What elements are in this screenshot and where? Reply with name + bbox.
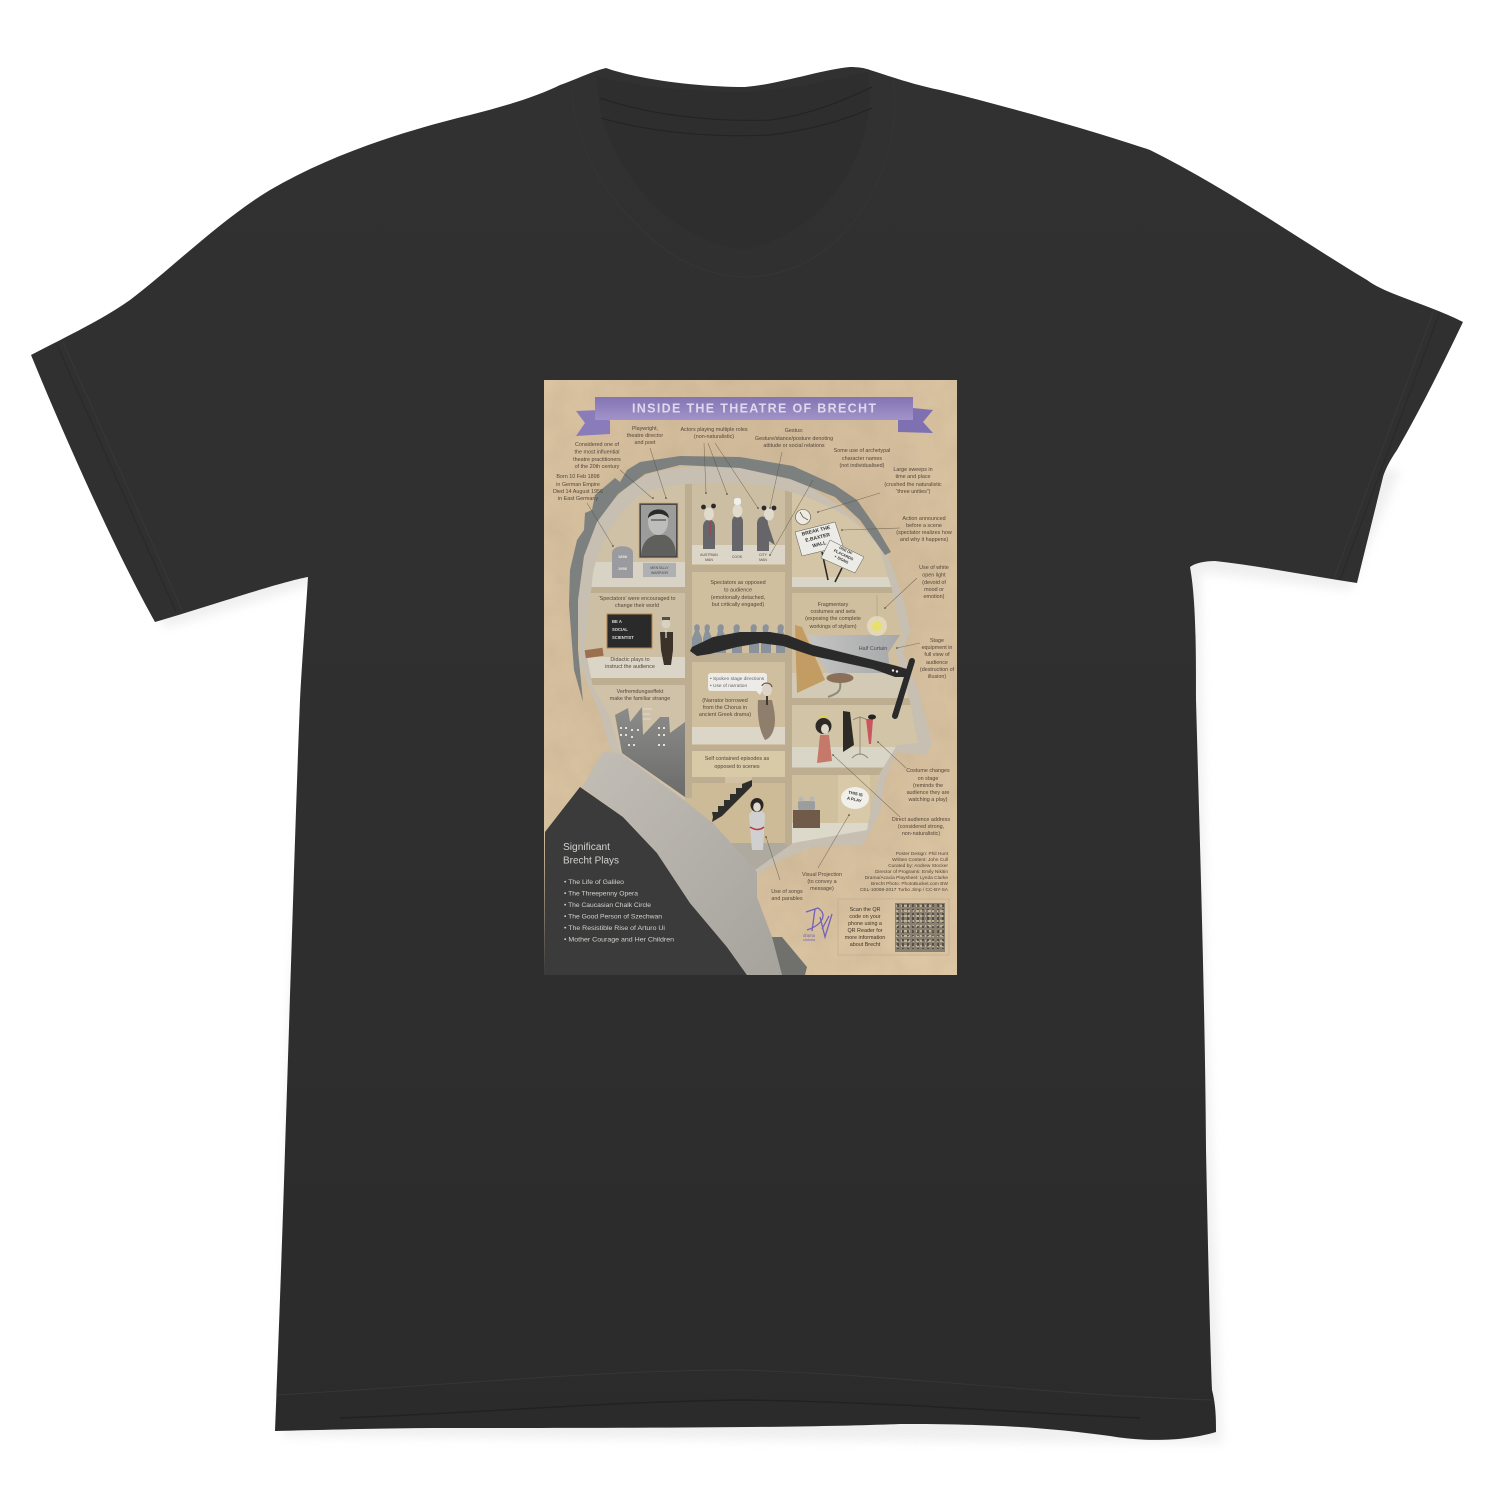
placard: use of placards xyxy=(821,540,864,573)
annotations right: (destruction of xyxy=(920,667,955,673)
tombstone: 1956 xyxy=(618,566,628,571)
annotations inside rooms: (Narrator borrowed xyxy=(702,698,748,704)
annotations left and top: Some use of archetypal xyxy=(834,448,890,454)
annotations right: Stage xyxy=(930,638,944,644)
room: portrait xyxy=(591,562,685,593)
annotations right: full view of xyxy=(924,652,950,658)
actor 3 xyxy=(757,506,776,551)
placard: break the wall xyxy=(795,522,843,556)
half curtain xyxy=(807,635,900,673)
queen figure xyxy=(816,715,832,763)
factory xyxy=(615,707,685,797)
credits xyxy=(860,851,949,893)
projection screen: A PLAY xyxy=(847,795,862,803)
annotations right: before a scene xyxy=(906,523,942,529)
significant plays list: • The Caucasian Chalk Circle xyxy=(564,902,652,909)
head cross-section xyxy=(569,456,940,890)
annotations right: and why it happens) xyxy=(900,537,948,543)
annotations right: “three unities”) xyxy=(896,489,931,495)
blackboard: SOCIAL xyxy=(612,627,628,632)
significant plays list: Brecht Plays xyxy=(563,856,619,866)
blackboard: BE A xyxy=(612,619,622,624)
placard: use of placards: USE OF xyxy=(838,546,853,556)
actor captions: COOK xyxy=(732,555,743,559)
actor captions: CITY xyxy=(759,553,768,557)
QR panel: QR Reader for xyxy=(847,928,883,934)
annotations right: audience they are xyxy=(907,790,949,796)
annotations right: non-naturalistic) xyxy=(902,831,940,837)
placard: break the wall: BREAK THE xyxy=(801,525,832,538)
black costume panel xyxy=(843,711,854,752)
annotations inside rooms: from the Chorus in xyxy=(703,705,747,711)
annotations inside rooms: to audience xyxy=(724,588,752,594)
projection screen: THIS IS xyxy=(848,790,863,798)
credits: Written Content: John Cull xyxy=(892,857,948,863)
drama victoria logo xyxy=(803,908,832,942)
annotations right: (crushed the naturalistic xyxy=(884,482,942,488)
significant plays list xyxy=(563,842,675,944)
annotations inside rooms: Verfremdungseffekt xyxy=(617,689,664,695)
annotations left and top: theatre director xyxy=(627,433,663,439)
annotations right: Large sweeps in xyxy=(893,467,933,473)
room: projection xyxy=(792,823,868,844)
actor 1 xyxy=(701,504,716,549)
speech bubble: • Use of narration xyxy=(710,683,747,689)
QR code xyxy=(895,903,945,952)
half curtain: Half Curtain xyxy=(859,646,887,652)
significant plays list: • The Resistible Rise of Arturo Ui xyxy=(564,925,665,932)
speech bubble xyxy=(708,673,767,695)
typewriter and desk xyxy=(793,796,820,828)
annotations inside rooms: opposed to scenes xyxy=(714,764,760,770)
head outer stone band xyxy=(575,466,932,875)
name plaque: MENTALLY xyxy=(650,566,669,570)
annotations left and top: character names xyxy=(842,456,882,462)
annotations inside rooms: ‘Spectators’ were encouraged to xyxy=(598,596,676,602)
annotations inside rooms: change their world xyxy=(615,603,659,609)
QR panel: phone using a xyxy=(848,921,882,927)
narrator figure xyxy=(758,683,775,740)
tombstone xyxy=(612,546,633,578)
annotations left and top: Gesture/stance/posture denoting xyxy=(755,436,833,442)
annotations left and top: Gestus: xyxy=(785,428,803,434)
annotations right: Action announced xyxy=(902,516,946,522)
projection screen xyxy=(841,787,869,809)
room: episodes xyxy=(692,777,785,783)
annotations right: time and place xyxy=(895,474,931,480)
speech bubble: • Spoken stage directions xyxy=(710,676,765,682)
annotations right: Costume changes xyxy=(906,768,950,774)
annotations right: illusion) xyxy=(928,674,946,680)
annotations left and top: Actors playing multiple roles xyxy=(680,427,748,433)
stool xyxy=(826,673,854,697)
jacket dark xyxy=(544,787,747,975)
annotations right: (considered strong, xyxy=(898,824,945,830)
annotations left and top: and poet xyxy=(635,440,656,446)
room: actors xyxy=(692,545,785,572)
annotations right: audience xyxy=(926,660,948,666)
QR panel xyxy=(838,899,949,955)
annotations inside rooms: Didactic plays to xyxy=(610,657,650,663)
placard sticks xyxy=(822,552,842,582)
annotations inside rooms: (exposing the complete xyxy=(805,616,861,622)
significant plays list: • The Threepenny Opera xyxy=(564,890,639,898)
annotations left and top: the most influential xyxy=(575,450,619,456)
annotations inside rooms: ancient Greek drama) xyxy=(699,712,751,718)
annotations bottom: Use of songs xyxy=(771,889,803,895)
banner xyxy=(576,397,933,436)
annotations right: mood or xyxy=(924,587,944,593)
drama victoria logo: victoria xyxy=(803,938,816,942)
poster paper xyxy=(544,380,957,975)
orange flat xyxy=(795,625,825,693)
shirt collar xyxy=(582,752,782,975)
credits: Curated by: Andrew Stocker xyxy=(888,863,948,869)
room: stage equipment xyxy=(792,673,910,705)
clock xyxy=(796,510,810,524)
credits: CEL-10069-2017 Turbo Jimp / CC-BY-SA xyxy=(860,887,949,893)
banner title: INSIDE THE THEATRE OF BRECHT xyxy=(632,402,876,416)
placard: break the wall: E.BAXTER xyxy=(805,532,831,544)
annotations right: (devoid of xyxy=(922,580,946,586)
drama victoria logo: drama xyxy=(803,933,816,938)
credits: Brecht Photo: PhotoBucket.com BW xyxy=(871,881,948,887)
wooden sign xyxy=(585,648,604,658)
annotations bottom: Visual Projection xyxy=(802,872,842,878)
significant plays list: • Mother Courage and Her Children xyxy=(564,936,675,944)
annotations right: (reminds the xyxy=(913,783,943,789)
annotations right: Use of white xyxy=(919,565,949,571)
annotations right: equipment in xyxy=(922,645,952,651)
annotations right: on stage xyxy=(918,776,938,782)
annotations left and top: attitude or social relations xyxy=(763,443,825,449)
significant plays list: • The Good Person of Szechwan xyxy=(564,914,663,920)
annotations right: Direct audience address xyxy=(892,817,950,823)
QR panel: about Brecht xyxy=(850,942,881,948)
annotations left and top: Playwright, xyxy=(632,426,659,432)
credits: Drama/Acacia Playsheet: Lynda Clarke xyxy=(865,875,948,881)
annotations inside rooms: make the familiar strange xyxy=(610,696,670,702)
actor captions: AUSTRIAN xyxy=(700,553,718,557)
tombstone: 1898 xyxy=(618,554,628,559)
annotations right: emotion) xyxy=(924,594,945,600)
annotations inside rooms: instruct the audience xyxy=(605,664,655,670)
annotations left and top: (not individualised) xyxy=(840,463,885,469)
annotations right: watching a play) xyxy=(908,797,948,803)
annotations left and top: Considered one of xyxy=(575,442,620,448)
leader lines xyxy=(587,443,920,880)
room: factory xyxy=(585,685,685,800)
room: blackboard xyxy=(587,657,685,685)
annotations inside rooms: (emotionally detached, xyxy=(711,595,766,601)
stage light xyxy=(867,595,887,636)
room: narrator xyxy=(692,727,785,751)
rooms xyxy=(585,482,918,870)
annotations left and top: Died 14 August 1956 xyxy=(553,489,603,495)
annotations right xyxy=(884,467,955,837)
coat rack xyxy=(852,716,868,758)
actor captions: MAN xyxy=(759,558,767,562)
annotations inside rooms: workings of stylism) xyxy=(808,624,857,630)
blackboard xyxy=(607,614,652,648)
room: stairs xyxy=(685,783,790,872)
annotations right: (spectator realizes how xyxy=(896,530,952,536)
name plaque: WARRIOR xyxy=(651,571,669,575)
placard: break the wall: WALL xyxy=(812,540,827,549)
annotations bottom: and parables xyxy=(771,896,803,902)
QR panel: code on your xyxy=(849,914,881,920)
significant plays list: Significant xyxy=(563,842,610,853)
actor captions xyxy=(700,553,768,562)
QR panel: Scan the QR xyxy=(850,907,881,913)
room: costume xyxy=(792,747,896,775)
annotations bottom: message) xyxy=(810,886,834,892)
annotations bottom xyxy=(771,872,842,902)
annotations inside rooms: Self contained episodes as xyxy=(705,756,770,762)
credits: Poster Design: Phil Hunt xyxy=(896,851,949,857)
annotations left and top: Born 10 Feb 1898 xyxy=(556,474,600,480)
annotations inside rooms: Fragmentary xyxy=(818,602,849,608)
annotations inside rooms xyxy=(598,580,861,770)
audience silhouettes xyxy=(692,624,785,653)
annotations left and top: of the 20th century xyxy=(575,464,620,470)
annotations right: open light xyxy=(922,572,946,578)
significant plays list: • The Life of Galileo xyxy=(564,879,625,886)
staircase xyxy=(712,780,752,822)
annotations left and top: (non-naturalistic) xyxy=(694,434,734,440)
credits: Director of Programs: Emily Nikitin xyxy=(875,869,948,875)
poster xyxy=(544,380,957,975)
actor figures xyxy=(700,498,776,562)
annotations inside rooms: Spectators as opposed xyxy=(710,580,766,586)
vertical beams xyxy=(685,478,792,845)
annotations left and top: in German Empire xyxy=(556,482,600,488)
blackboard: SCIENTIST xyxy=(612,635,634,640)
name plaque xyxy=(643,563,676,577)
head dark outline band xyxy=(569,456,891,702)
room: signs xyxy=(792,577,892,593)
woman at stairs xyxy=(749,798,765,850)
annotations inside rooms: but critically engaged) xyxy=(712,602,764,608)
red costume on rack xyxy=(866,714,876,744)
man with glasses xyxy=(660,617,673,665)
portrait of Brecht xyxy=(639,503,678,558)
room: spectators xyxy=(692,653,785,662)
placard: use of placards: PLACARDS xyxy=(833,549,854,562)
placard: use of placards: + SIGNS xyxy=(834,554,849,565)
annotations inside rooms: costumes and sets xyxy=(811,609,856,615)
grey lapel xyxy=(772,937,807,975)
annotations left and top xyxy=(553,426,890,502)
actor captions: MAN xyxy=(705,558,713,562)
annotations bottom: (to convey a xyxy=(807,879,837,885)
QR panel: more information xyxy=(845,935,885,941)
actor 2 xyxy=(732,498,743,551)
glasses xyxy=(690,632,912,716)
annotations left and top: in East Germany xyxy=(558,496,598,502)
annotations left and top: theatre practitioners xyxy=(573,457,621,463)
